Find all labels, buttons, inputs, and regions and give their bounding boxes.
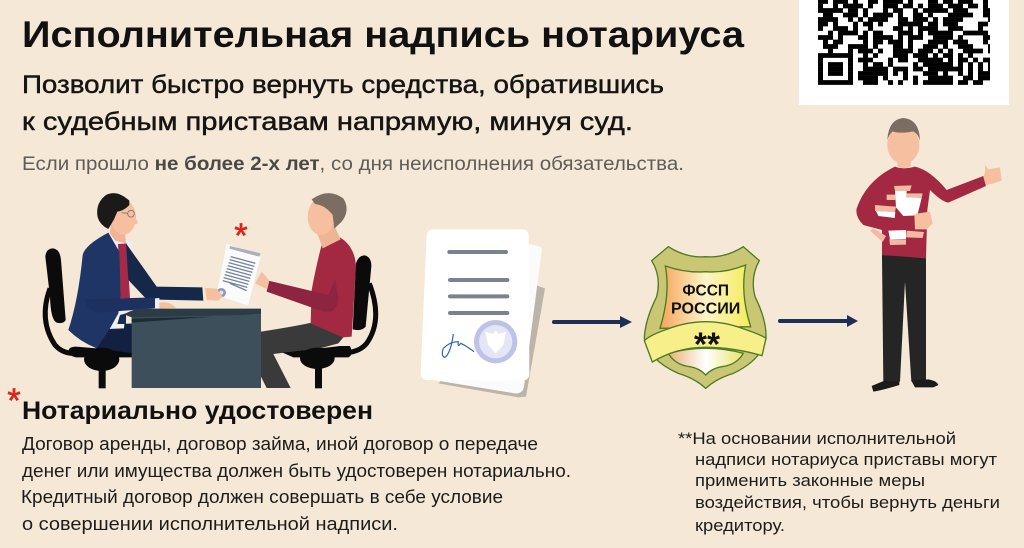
client <box>255 193 356 388</box>
subtitle <box>22 71 664 136</box>
illustration: notary and client at the desk <box>45 193 376 388</box>
shoes <box>872 381 899 392</box>
footnote: bailiff measures: воздействия, чтобы вернуть деньги <box>695 493 1000 512</box>
red asterisk on document: * <box>234 217 248 255</box>
sweater <box>856 167 986 258</box>
banknotes <box>870 185 924 245</box>
badge text: ФССП <box>682 282 729 299</box>
footnote: bailiff measures: кредитору. <box>695 516 785 535</box>
section asterisk: * <box>7 382 21 420</box>
body text: notarized contract: денег или имущества должен быть удостоверен нотариально. <box>22 461 571 481</box>
badge text: ** <box>694 326 720 363</box>
body text: notarized contract: Кредитный договор должен совершать в себе условие <box>21 487 503 507</box>
heading: notarized: Нотариально удостоверен <box>22 397 373 425</box>
body text: notarized contract <box>21 434 571 534</box>
signature <box>442 334 474 357</box>
badge text <box>671 282 740 363</box>
body text: notarized contract: Договор аренды, договор займа, иной договор о передаче <box>22 434 538 454</box>
title: Исполнительная надпись нотариуса <box>22 14 744 55</box>
right chair <box>283 255 376 388</box>
paper stack with signature and seal <box>421 229 545 397</box>
time limit note: Если прошло не более 2-х лет , со дня неисполнения обязательства. <box>22 154 684 175</box>
badge text: РОССИИ <box>671 300 740 317</box>
footnote: bailiff measures: **На основании исполнительной <box>678 429 956 448</box>
trousers <box>882 255 926 383</box>
subtitle: к судебным приставам напрямую, минуя суд. <box>22 108 633 136</box>
footnote: bailiff measures: применить законные меры <box>695 471 925 490</box>
desk <box>124 309 261 388</box>
round seal <box>474 320 517 363</box>
body text: notarized contract: о совершении исполнительной надписи. <box>22 514 398 534</box>
hand thumb up <box>983 165 1002 185</box>
footnote: bailiff measures <box>678 429 1000 535</box>
creditor with money <box>856 118 1002 392</box>
neck and head <box>897 153 911 168</box>
left chair <box>45 248 133 388</box>
notary <box>68 193 203 354</box>
holding arm <box>857 210 915 230</box>
arrow: bailiffs to creditor <box>780 315 858 327</box>
document with asterisk <box>205 243 261 306</box>
subtitle: Позволит быстро вернуть средства, обратившись <box>22 71 664 99</box>
bailiff shield badge <box>644 247 766 388</box>
footnote: bailiff measures: надписи нотариуса приставы могут <box>695 450 997 469</box>
arrow: document to bailiffs <box>554 316 632 328</box>
QR code <box>799 0 1009 105</box>
